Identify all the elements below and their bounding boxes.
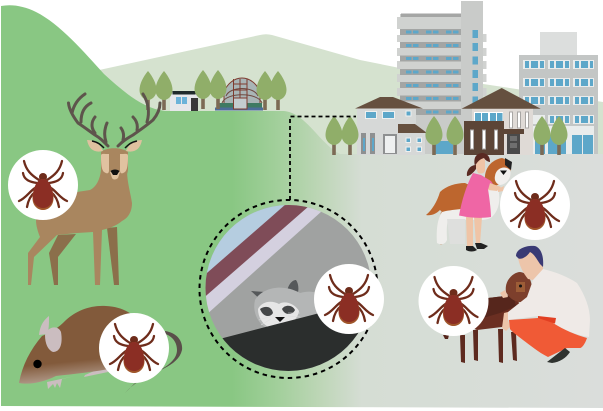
tick badge: mouse [99, 313, 169, 383]
tick badge: dog and girl [500, 170, 570, 240]
mouse [19, 306, 182, 393]
tick badge: deer [8, 150, 78, 220]
inset scene [206, 205, 370, 371]
high-rise apartment building [397, 1, 486, 156]
girl and dog [426, 153, 512, 252]
mid-rise building [519, 32, 598, 156]
dashed connector [290, 116, 356, 200]
house: left [355, 97, 427, 155]
tick badge: dog and man [418, 266, 488, 336]
greenhouse [215, 78, 263, 110]
small house on hill [170, 91, 198, 111]
trees: on the hill [140, 70, 286, 110]
magnified inset: raccoon [200, 200, 380, 380]
trees: by the town [326, 116, 568, 155]
tick badge: raccoon [314, 264, 384, 334]
dashed ring [200, 200, 378, 378]
raccoon [251, 280, 317, 327]
deer [28, 94, 160, 285]
background distant hill [90, 34, 603, 160]
house: right [462, 88, 541, 155]
man and dog [443, 246, 590, 363]
